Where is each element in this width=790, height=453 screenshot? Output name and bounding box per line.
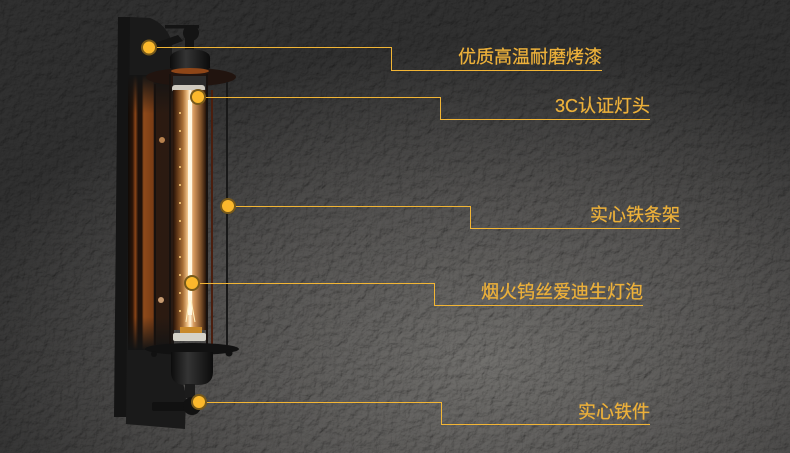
- lamp base and white socket: [173, 327, 206, 341]
- top mounting arm: [152, 25, 199, 51]
- bottom mounting arm: [152, 397, 201, 415]
- callout: 实心铁条架: [221, 199, 680, 228]
- callout: 烟火钨丝爱迪生灯泡: 烟火钨丝爱迪生灯泡: [481, 282, 643, 302]
- backplate: [114, 17, 186, 429]
- screws on backplate: [158, 137, 165, 303]
- wire cage rods: [155, 74, 227, 345]
- callout: 实心铁件: [192, 395, 650, 424]
- callout: 实心铁条架: 实心铁条架: [590, 205, 680, 225]
- callout: 3C认证灯头: 3C认证灯头: [555, 96, 650, 116]
- wall lamp illustration: [114, 17, 239, 429]
- callout: 实心铁件: 实心铁件: [578, 402, 650, 422]
- callout: 优质高温耐磨烤漆: [142, 40, 602, 70]
- callout: 烟火钨丝爱迪生灯泡: [185, 276, 643, 306]
- glass tube with filament: [173, 90, 206, 330]
- top cap and flange: [146, 49, 236, 92]
- callout: 3C认证灯头: [191, 90, 650, 120]
- callout: 优质高温耐磨烤漆: 优质高温耐磨烤漆: [458, 47, 602, 67]
- bottom flange and cup: [145, 343, 239, 398]
